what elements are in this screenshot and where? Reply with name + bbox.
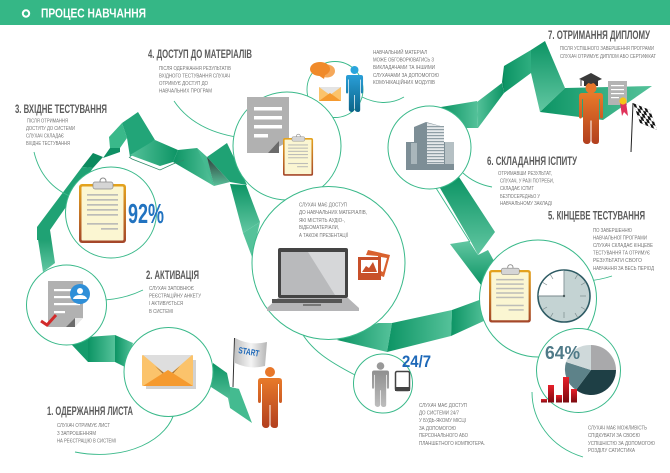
step 6 text [487, 156, 578, 207]
24/7 text: ЗА ДОПОМОГОЮ [419, 426, 456, 432]
step 2 text: І АКТИВУЄТЬСЯ [149, 301, 183, 307]
ribbon: step 6 up to step 7 [441, 41, 652, 128]
circle: 24/7 [354, 354, 412, 413]
step 6 text: НАВЧАЛЬНОМУ ЗАКЛАДІ [500, 201, 552, 207]
step 4 text: 4. ДОСТУП ДО МАТЕРІАЛІВ [148, 49, 252, 61]
icon: start flag [233, 338, 267, 387]
step 3 text: СЛУХАЧ СКЛАДАЄ [26, 134, 64, 140]
title: ПРОЦЕС НАВЧАННЯ [41, 6, 146, 20]
central text: ВІДЕОМАТЕРІАЛИ, [299, 225, 339, 231]
icon: graduate person [579, 73, 603, 144]
icon: checkered flag [631, 103, 657, 152]
icon: blue person [346, 66, 363, 112]
label 24/7: 24/7 [402, 352, 431, 371]
step 6 text: 6. СКЛАДАННЯ ІСПИТУ [487, 156, 578, 168]
step 4 text: НАВЧАЛЬНИХ ПРОГРАМ [159, 88, 212, 94]
step 3 text: ПІСЛЯ ОТРИМАННЯ [27, 119, 68, 125]
circle: step 5 [480, 240, 596, 357]
step 2 text: РЕЄСТРАЦІЙНУ АНКЕТУ [149, 292, 201, 300]
circle: step 1 [124, 328, 213, 416]
ribbon: step 6 down to step 5 [436, 177, 495, 285]
icon: grey person [372, 362, 389, 407]
step 5 text: ТЕСТУВАННЯ ТА ОТРИМУЄ [593, 250, 650, 256]
step 1 text: 1. ОДЕРЖАННЯ ЛИСТА [47, 406, 133, 418]
step 3 text: ВХІДНЕ ТЕСТУВАННЯ [26, 141, 70, 147]
ribbon: path from step 2 to step 4 [37, 112, 247, 272]
step 2 text: 2. АКТИВАЦІЯ [146, 270, 199, 282]
discussion text: МОЖЕ ОБГОВОРЮВАТИСЬ З [373, 58, 434, 64]
icon: clipboard step 3 [79, 178, 126, 243]
statistics text: УСПІШНІСТЮ ЗА ДОПОМОГОЮ [588, 441, 655, 447]
step 7 text [548, 30, 657, 60]
statistics text: СЛУХАЧ МАЄ МОЖЛИВІСТЬ [588, 426, 647, 432]
step 6 text: СКЛАДАЄ ІСПИТ [500, 186, 535, 192]
24/7 text: ДО СИСТЕМИ 24/7 [419, 410, 459, 416]
circle: central laptop [252, 186, 405, 340]
icon: registration document [41, 281, 90, 327]
flag label: START [238, 345, 260, 359]
24/7 text: ПЕРСОНАЛЬНОГО АБО [419, 433, 468, 439]
central text: ДО НАВЧАЛЬНИХ МАТЕРІАЛІВ, [299, 210, 367, 216]
icon: document with clipboard [247, 97, 313, 176]
24/7 text: У БУДЬ-ЯКОМУ МІСЦІ [419, 418, 466, 424]
icon: laptop [267, 248, 359, 311]
discussion text: КОМУНІКАЦІЙНИХ МОДУЛІВ [373, 78, 435, 86]
circle: step 3 [66, 167, 156, 258]
header bullet [23, 10, 29, 17]
leader lines [34, 97, 612, 457]
step 1 text: З ЗАПРОШЕННЯМ [57, 431, 96, 437]
step 4 text [148, 49, 252, 94]
step 3 text [15, 104, 107, 147]
statistics text [588, 426, 655, 454]
icon: tablet [395, 372, 410, 391]
icon: photos [358, 250, 390, 280]
header bar [0, 0, 670, 25]
step 1 text: НА РЕЄСТРАЦІЮ В СИСТЕМІ [57, 438, 116, 444]
step 2 text: СЛУХАЧ ЗАПОВНЮЄ [149, 286, 194, 292]
ribbon: step 1 to start [211, 363, 252, 423]
step 4 text: ВХІДНОГО ТЕСТУВАННЯ СЛУХАЧ [159, 74, 230, 80]
step 5 text: ПО ЗАВЕРШЕННЮ [593, 228, 632, 234]
step 6 text: СЛУХАЧ, У РАЗІ ПОТРЕБИ, [500, 178, 554, 184]
24/7 text: СЛУХАЧ МАЄ ДОСТУП [419, 403, 467, 409]
circle: step 2 [26, 265, 106, 345]
discussion text: ВИКЛАДАЧАМИ ТА ІНШИМИ [373, 65, 435, 71]
central text [299, 202, 367, 239]
step 1 text: СЛУХАЧ ОТРИМУЄ ЛИСТ [57, 423, 111, 429]
icon: orange person [258, 367, 282, 428]
icon: small envelope [319, 87, 341, 101]
step 5 text [548, 210, 654, 272]
step 5 text: СЛУХАЧ СКЛАДАЄ КІНЦЕВЕ [593, 243, 653, 249]
step 1 text [47, 406, 133, 444]
statistics text: СПІДКУВАТИ ЗА СВОЄЮ [588, 433, 640, 439]
icon: building [406, 122, 454, 170]
step 5 text: РЕЗУЛЬТАТИ СВОГО [593, 258, 642, 264]
icon: chat bubbles [310, 62, 335, 79]
step 3 text: 3. ВХІДНЕ ТЕСТУВАННЯ [15, 104, 107, 116]
central text: ЯКІ МІСТЯТЬ АУДІО-, [299, 218, 345, 224]
step 6 text: БЕЗПОСЕРЕДНЬО У [500, 194, 540, 200]
circle: statistics [536, 328, 620, 412]
circle: step 6 [388, 106, 471, 189]
step 4 text: ОТРИМУЄ ДОСТУП ДО [159, 81, 208, 87]
circle: step 4 [233, 92, 341, 200]
circle: discussion [307, 62, 363, 118]
step 2 text [146, 270, 201, 315]
step 2 text: В СИСТЕМІ [149, 309, 173, 315]
step 5 text: НАВЧАННЯ ЗА ВЕСЬ ПЕРІОД [593, 266, 654, 272]
ribbon: laptop to step 5 [337, 299, 486, 352]
icon: clock [538, 270, 590, 322]
percent 92: 92% [128, 198, 164, 229]
central text: СЛУХАЧ МАЄ ДОСТУП [299, 202, 347, 208]
24/7 text [419, 403, 485, 447]
bar chart [541, 377, 577, 402]
percent 64: 64% [545, 343, 580, 363]
statistics text: РОЗДІЛУ САТИСТИКА [588, 448, 635, 454]
step 3 text: ДОСТУПУ ДО СИСТЕМИ [26, 126, 75, 132]
icon: diploma [608, 81, 628, 116]
step 6 text: ОТРИМАВШИ РЕЗУЛЬТАТ, [498, 171, 552, 177]
discussion text: НАВЧАЛЬНИЙ МАТЕРІАЛ [373, 48, 427, 56]
step 5 text: НАВЧАЛЬНОЇ ПРОГРАМИ [593, 234, 647, 242]
icon: clipboard step 5 [489, 265, 531, 323]
24/7 text: ПЛАНШЕТНОГО КОМПЮТЕРА. [419, 441, 485, 447]
discussion text [373, 48, 439, 86]
pie chart [565, 345, 616, 395]
central text: А ТАКОЖ ПРЕЗЕНТАЦІЇ [299, 232, 348, 239]
ribbon: step 4 to laptop [230, 184, 260, 257]
icon: envelope [142, 355, 196, 389]
step 4 text: ПІСЛЯ ОДЕРЖАННЯ РЕЗУЛЬТАТІВ [159, 66, 231, 72]
ribbon: step 2 to step 1 [72, 335, 133, 367]
discussion text: СЛУХАЧАМИ ЗА ДОПОМОГОЮ [373, 73, 439, 79]
